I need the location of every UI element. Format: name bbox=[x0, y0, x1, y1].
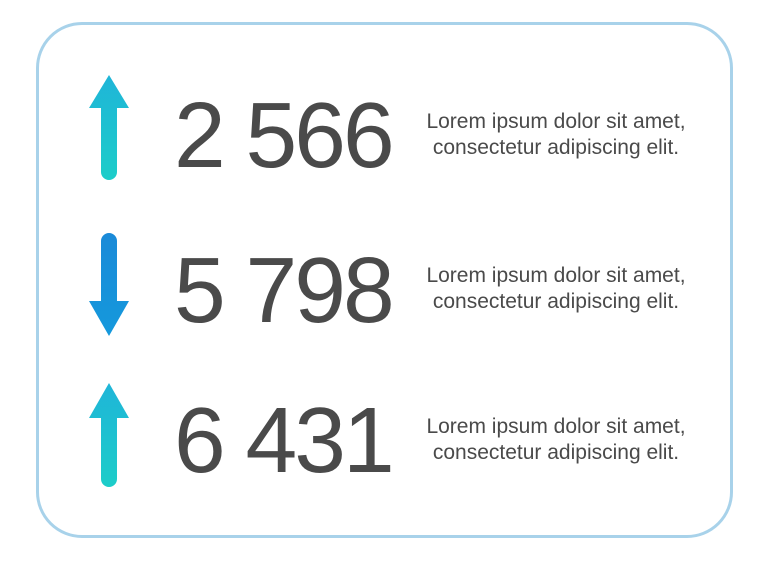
text 1: consectetur adipiscing elit. bbox=[433, 136, 679, 159]
text 2 bbox=[426, 264, 686, 313]
number 3: 6 431 bbox=[174, 388, 392, 492]
text 3: Lorem ipsum dolor sit amet, bbox=[426, 415, 686, 438]
text 1: Lorem ipsum dolor sit amet, bbox=[426, 110, 686, 133]
text 3 bbox=[426, 415, 686, 464]
icon: up arrow 1 bbox=[89, 75, 129, 180]
number 2: 5 798 bbox=[174, 238, 392, 342]
icon: down arrow bbox=[89, 233, 129, 336]
icon: up arrow 2 bbox=[89, 383, 129, 487]
text 3: consectetur adipiscing elit. bbox=[433, 441, 679, 464]
text 2: consectetur adipiscing elit. bbox=[433, 290, 679, 313]
text 1 bbox=[426, 110, 686, 159]
text 2: Lorem ipsum dolor sit amet, bbox=[426, 264, 686, 287]
number 1: 2 566 bbox=[174, 83, 392, 187]
